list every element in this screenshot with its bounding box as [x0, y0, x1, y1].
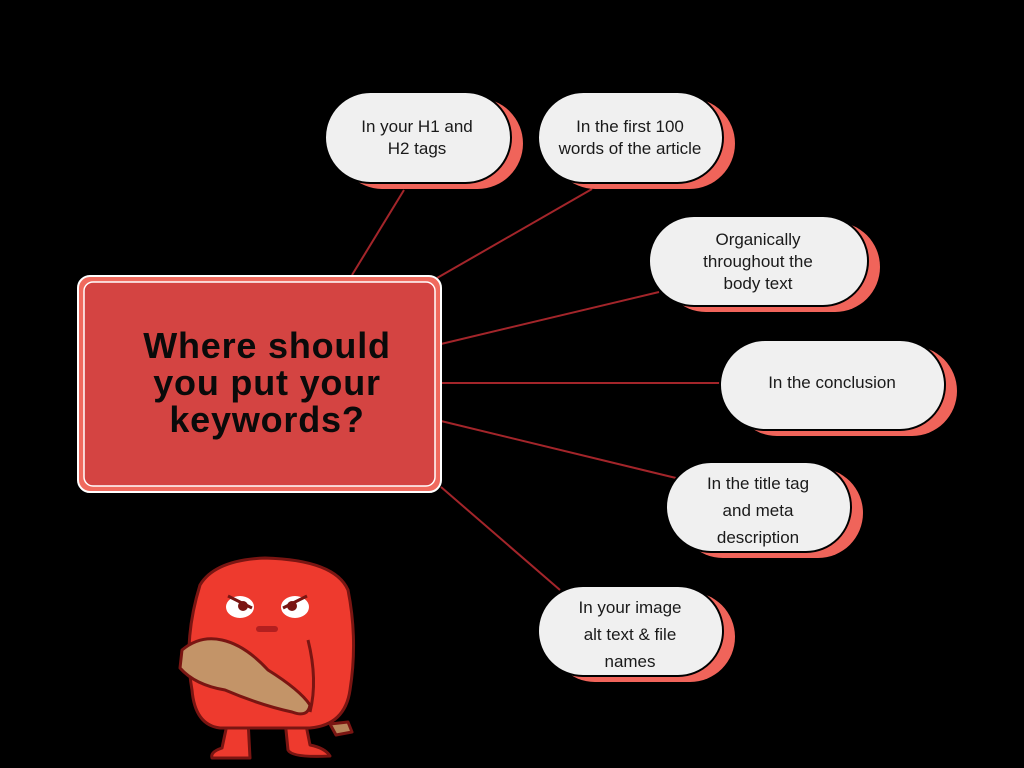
bubble: image alt text: In your image: [578, 598, 682, 617]
bubble: image alt text: alt text & file: [584, 625, 676, 644]
title: Where should: [143, 325, 391, 366]
bubble: organically: body text: [724, 274, 793, 293]
bubble: organically: throughout the: [703, 252, 813, 271]
bubble: organically: Organically: [715, 230, 801, 249]
bubble: first 100 words: words of the article: [558, 139, 701, 158]
bubble: first 100 words: [538, 92, 735, 189]
bubble: image alt text: [538, 586, 735, 682]
bubble: H1 H2: [325, 92, 523, 189]
bubble: title tag: description: [717, 528, 799, 547]
bubble: conclusion: [720, 340, 957, 436]
connector lines: [352, 189, 720, 590]
central title box: [78, 276, 441, 492]
bubble: H1 H2: H2 tags: [388, 139, 446, 158]
bubble: title tag: In the title tag: [707, 474, 809, 493]
bubble: first 100 words: In the first 100: [576, 117, 684, 136]
bubble: H1 H2: In your H1 and: [361, 117, 473, 136]
bubble: title tag: [666, 462, 863, 558]
central title box: keywords?: [169, 399, 365, 440]
bubble: organically: [649, 216, 880, 312]
bubble: title tag: and meta: [723, 501, 794, 520]
character: angry red monster with club: [180, 558, 354, 758]
central title box: you put your: [153, 362, 381, 403]
bubble: conclusion: In the conclusion: [768, 373, 896, 392]
bubble: image alt text: names: [604, 652, 656, 671]
